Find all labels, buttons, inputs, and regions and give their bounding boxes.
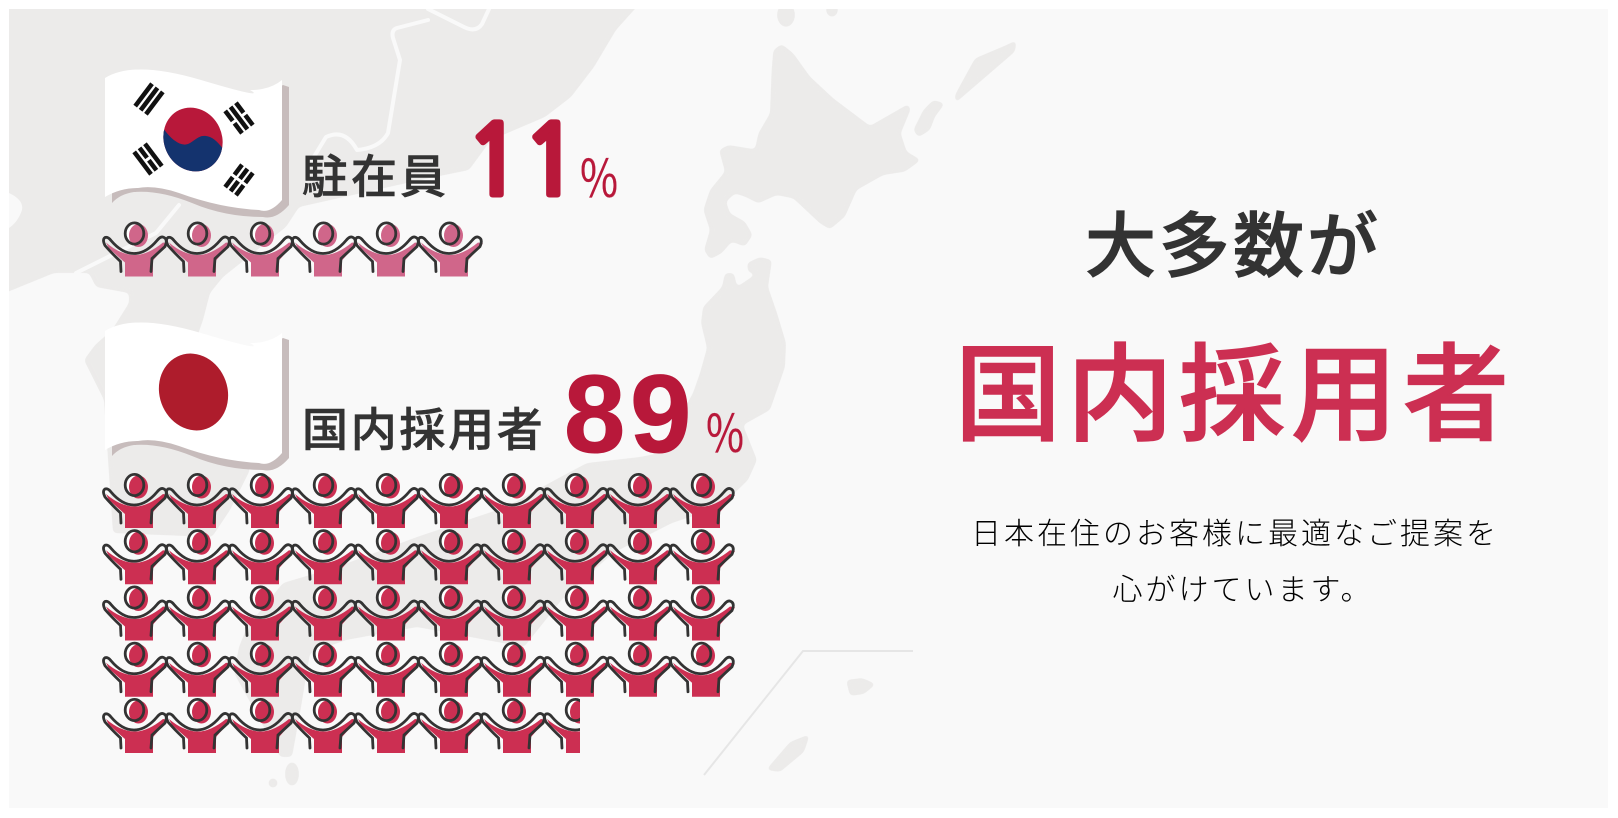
heading: local hires: 国内採用者 bbox=[955, 309, 1515, 463]
heading: majority: 大多数が bbox=[1085, 190, 1381, 292]
body text bbox=[971, 509, 1499, 609]
Japanese flag bbox=[105, 322, 289, 470]
number: 11 percent: % bbox=[580, 137, 618, 212]
background map of Japan and Korea bbox=[0, 0, 1017, 788]
label: expatriates: 駐在員 bbox=[302, 141, 449, 207]
people row: 6 pink figures bbox=[104, 223, 483, 276]
body line 2: 心がけています。 bbox=[1112, 565, 1374, 609]
number: 89 percent: 89 bbox=[564, 353, 696, 476]
people grid: 89 red figures bbox=[104, 474, 735, 753]
number: 89 percent: % bbox=[706, 392, 744, 467]
taegeuk bbox=[163, 108, 223, 172]
body line 1: 日本在住のお客様に最適なご提案を bbox=[971, 509, 1499, 553]
number: 11 percent: 11 bbox=[465, 114, 579, 210]
red sun bbox=[148, 344, 239, 440]
trigrams bbox=[132, 82, 255, 197]
Korean flag bbox=[105, 69, 289, 217]
label: local hires: 国内採用者 bbox=[302, 394, 546, 460]
